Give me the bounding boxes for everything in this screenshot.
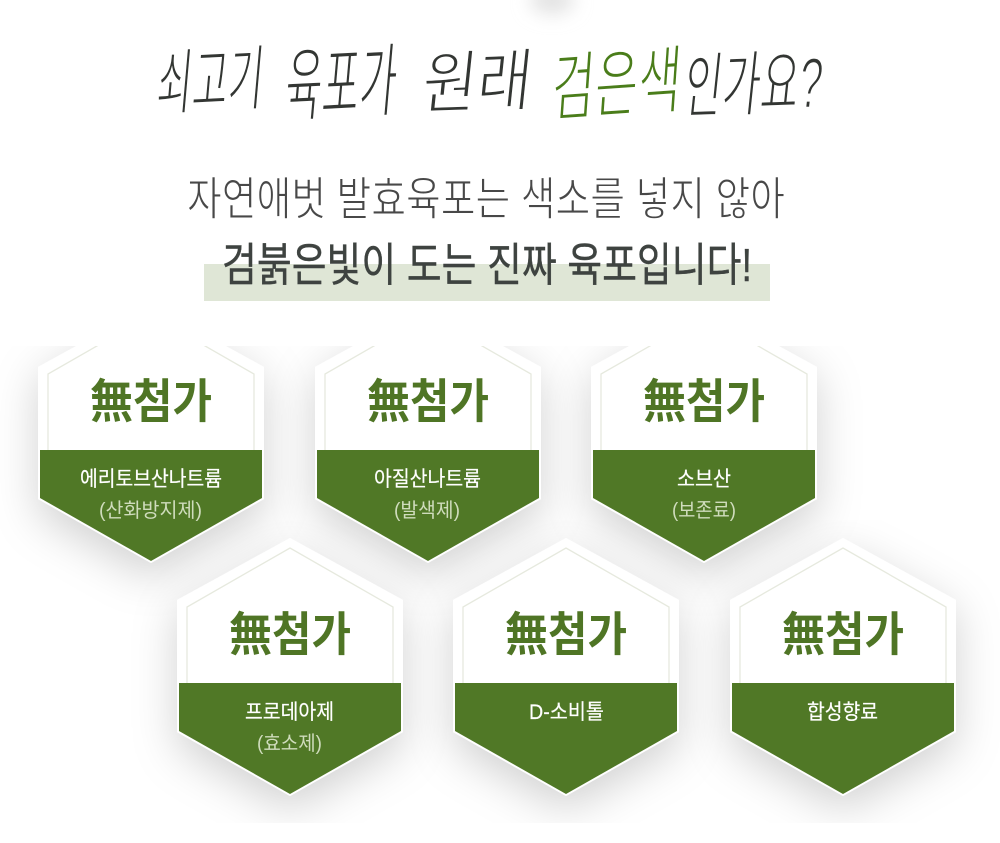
statement text: 검붉은빛이 도는 진짜 육포입니다!: [222, 239, 752, 291]
title: 검은색: [549, 38, 684, 131]
badge: 아질산나트륨: 아질산나트륨: [374, 468, 481, 491]
badge: 에리토브산나트륨: (산화방지제): [99, 499, 202, 522]
highlight bar: [204, 264, 770, 301]
badge: 소브산: 소브산: [677, 468, 731, 491]
badge: 소브산: 無첨가: [643, 375, 765, 428]
title: 원래: [418, 42, 536, 123]
top row of badges: [38, 305, 817, 563]
badge: 프로데아제: 프로데아제: [245, 701, 334, 724]
badge: 합성향료: 합성향료: [807, 701, 878, 724]
badge: 아질산나트륨: (발색제): [394, 499, 460, 522]
badge: D-소비톨: 無첨가: [505, 608, 627, 661]
badge: 에리토브산나트륨: [38, 305, 264, 563]
title: 육포가: [281, 37, 401, 133]
badge: 아질산나트륨: 無첨가: [367, 375, 489, 428]
badge: D-소비톨: [453, 538, 679, 796]
title: 인가요?: [680, 43, 827, 128]
badge: 합성향료: 無첨가: [782, 608, 904, 661]
badge: 프로데아제: (효소제): [257, 732, 322, 755]
badge: 에리토브산나트륨: 無첨가: [90, 375, 212, 428]
highlighted statement: [204, 239, 770, 301]
title: 쇠고기: [154, 39, 267, 125]
badge: 아질산나트륨: [315, 305, 541, 563]
badge: 프로데아제: [177, 538, 403, 796]
badge: 합성향료: [730, 538, 956, 796]
badge: 소브산: [591, 305, 817, 563]
badge: 프로데아제: 無첨가: [229, 608, 351, 661]
shadow tip from the section above: [530, 0, 574, 14]
badge: 에리토브산나트륨: 에리토브산나트륨: [80, 468, 222, 491]
badge: D-소비톨: D-소비톨: [529, 701, 604, 724]
bottom row of badges: [177, 538, 956, 796]
subtitle line: 자연애벗 발효육포는 색소를 넣지 않아: [187, 173, 785, 225]
title: [154, 37, 827, 133]
badge: 소브산: (보존료): [672, 500, 736, 522]
